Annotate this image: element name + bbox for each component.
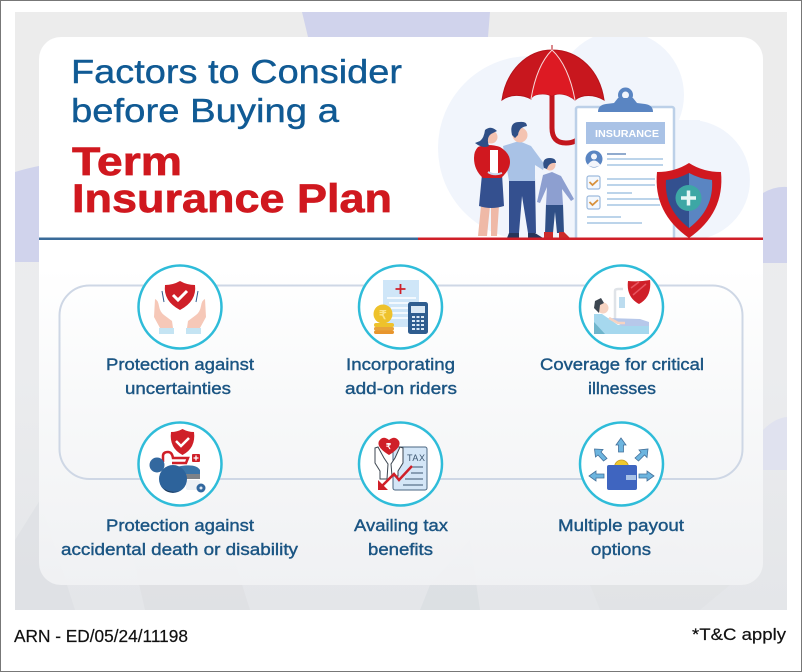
label: options bbox=[591, 540, 651, 559]
label: uncertainties bbox=[125, 379, 231, 398]
label: accidental death or disability bbox=[61, 540, 299, 559]
label bbox=[540, 355, 704, 398]
factor: incorporating add-on riders bbox=[345, 266, 457, 398]
label: Protection against bbox=[106, 355, 254, 374]
man bbox=[503, 122, 545, 238]
factor: protection against uncertainties bbox=[106, 266, 254, 398]
label: Incorporating bbox=[346, 355, 455, 374]
label bbox=[106, 355, 254, 398]
icon: tax document with hands and heart bbox=[359, 422, 442, 506]
shield bbox=[657, 163, 721, 238]
woman bbox=[474, 128, 510, 236]
icon: wheelchair with shield bbox=[138, 422, 222, 506]
title: Factors to Consider bbox=[71, 54, 402, 91]
icon: wallet with arrows bbox=[580, 422, 663, 506]
label: Availing tax bbox=[354, 516, 449, 535]
clipboard: INSURANCE bbox=[595, 128, 659, 140]
umbrella bbox=[502, 45, 604, 143]
icon: document, coins, calculator: ₹ bbox=[379, 308, 387, 322]
title: before Buying a bbox=[71, 93, 339, 130]
label: illnesses bbox=[588, 379, 656, 398]
factor: multiple payout options bbox=[558, 422, 684, 559]
illustration: family, umbrella, clipboard, shield bbox=[438, 31, 750, 242]
label: Coverage for critical bbox=[540, 355, 704, 374]
boy bbox=[537, 158, 574, 238]
label bbox=[558, 516, 684, 559]
factor: availing tax benefits bbox=[354, 422, 449, 559]
clipboard bbox=[576, 90, 674, 242]
icon: tax document with hands and heart: TAX bbox=[407, 453, 425, 463]
title bbox=[71, 54, 402, 221]
factor: accidental death or disability bbox=[61, 422, 299, 559]
icon: patient in bed with shield bbox=[580, 266, 663, 348]
title: Term bbox=[72, 140, 182, 184]
label bbox=[61, 516, 299, 559]
icon: tax document with hands and heart: ₹ bbox=[386, 442, 391, 451]
label: add-on riders bbox=[345, 379, 457, 398]
label: Protection against bbox=[106, 516, 254, 535]
rounded connector frame bbox=[60, 286, 742, 479]
title: Insurance Plan bbox=[72, 177, 392, 221]
footer: terms note: *T&C apply bbox=[692, 625, 787, 644]
header divider bbox=[39, 238, 763, 240]
background blobs bbox=[438, 31, 750, 240]
white card bbox=[39, 37, 763, 585]
footer: ARN code: ARN - ED/05/24/11198 bbox=[14, 626, 188, 646]
label: Multiple payout bbox=[558, 516, 684, 535]
label: benefits bbox=[368, 540, 433, 559]
icon: shield in hands bbox=[138, 266, 222, 348]
label bbox=[354, 516, 449, 559]
factor: coverage for critical illnesses bbox=[540, 266, 704, 398]
label bbox=[345, 355, 457, 398]
